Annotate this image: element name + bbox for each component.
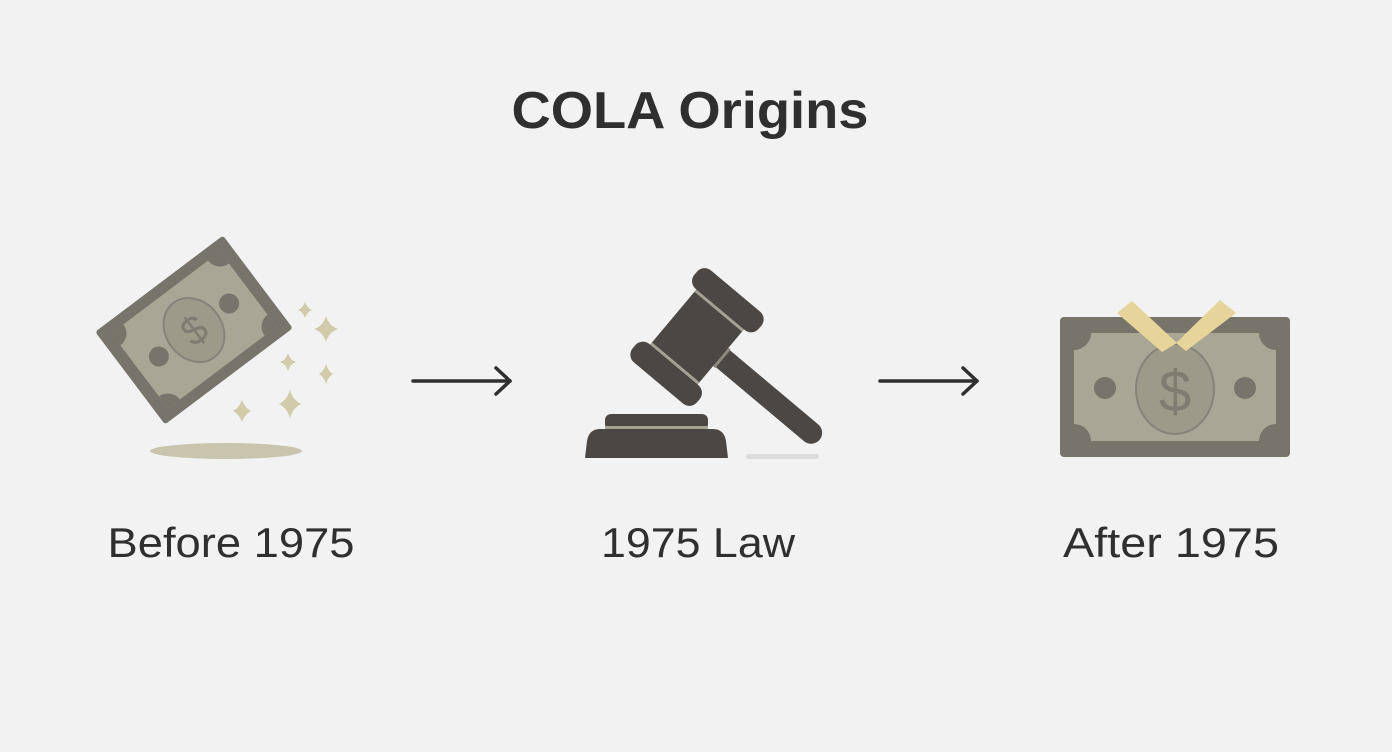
icon: gavel	[585, 264, 858, 486]
icon: falling dollar bill with sparkles	[90, 231, 338, 459]
label: 1975 law: 1975 Law	[601, 519, 796, 566]
icon: dollar bill with ribbon: $	[1159, 359, 1191, 424]
title: COLA Origins	[512, 82, 868, 140]
label: before 1975: Before 1975	[108, 519, 354, 566]
arrow 2	[880, 368, 977, 394]
icon: falling dollar bill with sparkles: $	[172, 307, 217, 355]
label: after 1975: After 1975	[1063, 519, 1279, 566]
arrow 1	[413, 368, 510, 394]
icon: dollar bill with ribbon	[1057, 300, 1293, 458]
